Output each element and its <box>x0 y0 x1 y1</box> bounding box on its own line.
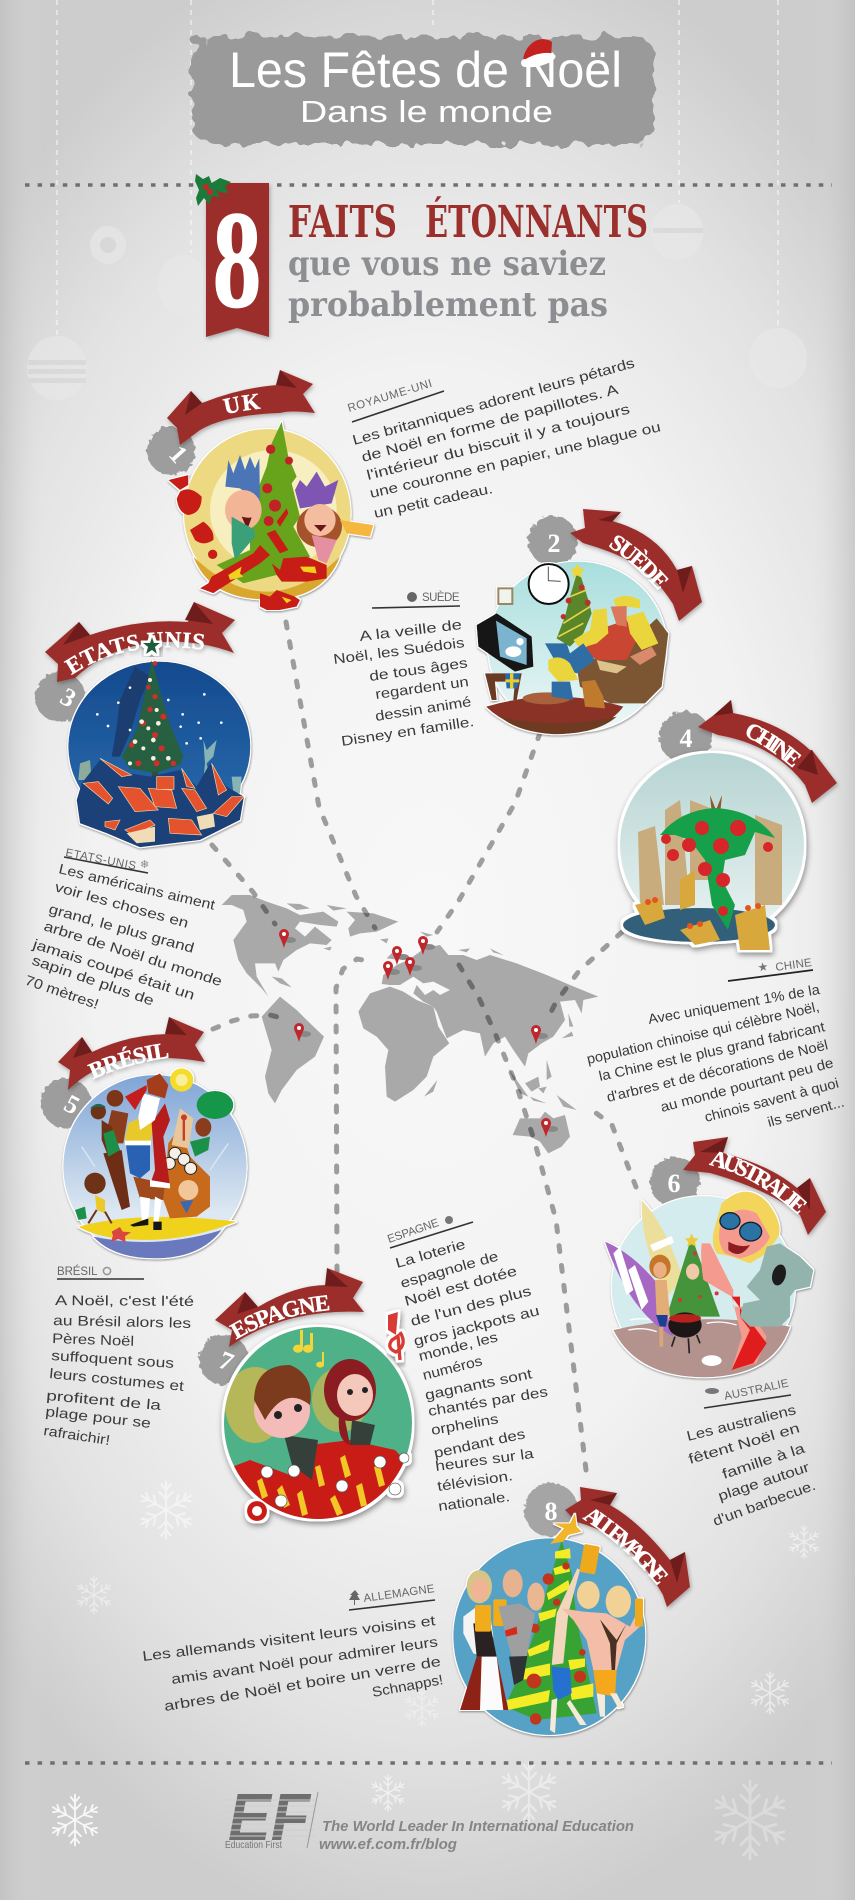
logo: EF: EF <box>228 1780 312 1855</box>
ribbon: Etats-Unis: ETATS UNIS <box>64 632 206 676</box>
ribbon: Chine: CHINE <box>746 724 802 768</box>
text: Etats-Unis fact: voir les choses en <box>53 878 190 931</box>
title text: Dans le monde <box>300 94 553 129</box>
family <box>583 620 637 660</box>
text: Suède fact: dessin animé <box>374 693 473 724</box>
logo: EF: Education First <box>225 1839 282 1851</box>
text: Australie fact <box>685 1401 818 1529</box>
text: Allemagne fact: Schnapps! <box>371 1671 444 1700</box>
number badge 8 <box>524 1483 578 1537</box>
icon: holly <box>195 174 231 206</box>
text: Etats-Unis fact: jamais coupé était un <box>30 935 197 1003</box>
text: Brésil fact: rafraichir! <box>43 1422 111 1448</box>
text: Etats-Unis fact: grand, le plus grand <box>47 900 196 956</box>
panel: Chine <box>585 700 846 1130</box>
ribbon: Etats-Unis <box>45 602 237 685</box>
ribbon: UK: UK <box>222 394 261 414</box>
dotted divider top <box>25 183 832 187</box>
hanging ornaments <box>27 0 807 400</box>
icon: santa hat <box>521 39 557 70</box>
village <box>77 760 244 847</box>
caption: Suède <box>372 591 460 608</box>
text: UK fact <box>351 354 662 521</box>
text: Espagne fact: orphelins <box>430 1410 499 1438</box>
text: Suède fact <box>332 616 475 749</box>
number badge 1: 1 <box>163 440 193 469</box>
heading: ÉTONNANTS <box>425 195 648 248</box>
caption: Etats-Unis: ETATS-UNIS <box>64 847 137 873</box>
ribbon: Suède: SUÈDE <box>609 536 669 594</box>
title banner <box>192 36 654 144</box>
couch <box>577 618 668 703</box>
text: Etats-Unis fact: Les américains aiment <box>57 860 217 913</box>
koala <box>740 1243 813 1327</box>
caption: Chine: ★ <box>757 959 769 975</box>
text: Brésil fact: Pères Noël <box>52 1330 134 1349</box>
map: australia <box>513 1112 570 1153</box>
illustration: German party <box>453 1513 645 1735</box>
number badge 7 <box>199 1335 249 1385</box>
ribbon: Chine <box>698 700 839 806</box>
caption: Australie <box>704 1377 791 1408</box>
text: Allemagne fact: amis avant Noël pour admirer leurs <box>170 1633 439 1687</box>
ribbon: Brésil <box>58 1017 207 1092</box>
heading <box>288 195 648 325</box>
TV and furniture <box>477 613 533 672</box>
text: Brésil fact: profitent de la <box>46 1387 162 1413</box>
panel: Allemagne <box>141 1482 693 1738</box>
text: Australie fact: Les australiens <box>685 1401 797 1444</box>
text: Brésil fact: plage pour se <box>45 1403 152 1431</box>
text: Suède fact: de tous âges <box>368 654 468 684</box>
text: Suède fact: Noël, les Suédois <box>332 634 465 667</box>
heading: que vous ne saviez <box>288 244 606 284</box>
number badge 1 <box>147 427 195 475</box>
number badge 5 <box>41 1078 91 1128</box>
illustration: Swedish family watching TV <box>477 562 668 734</box>
woman <box>701 1243 767 1370</box>
man 2 arm up <box>552 1568 580 1665</box>
map: africa <box>358 987 449 1102</box>
text: Australie fact: famille à la <box>720 1440 807 1482</box>
text: Suède fact: A la veille de <box>358 616 463 644</box>
text: Allemagne fact <box>141 1612 444 1714</box>
tree <box>557 568 592 647</box>
icon: tree top star <box>143 637 160 654</box>
caption: Brésil <box>57 1265 144 1279</box>
text: Chine fact <box>585 981 846 1130</box>
caption: Australie: AUSTRALIE <box>723 1377 790 1403</box>
right kid and woman <box>178 1180 198 1200</box>
caption: Espagne: ESPAGNE <box>386 1217 441 1246</box>
dashed routes <box>212 622 636 1470</box>
text: Espagne fact: heures sur la <box>434 1445 535 1474</box>
text: Chine fact: chinois savent à quoi <box>703 1075 840 1125</box>
text: Australie fact: fêtent Noël en <box>686 1419 801 1467</box>
ribbon: UK <box>167 370 317 447</box>
heading: FAITS <box>288 197 397 248</box>
map: south america <box>262 997 324 1103</box>
number badge 2: 2 <box>548 529 560 558</box>
text: Espagne fact: gros jackpots au <box>412 1302 541 1349</box>
ribbon: Espagne: ESPAGNE <box>228 1295 330 1340</box>
panel: UK <box>146 354 662 614</box>
footer: EF logo and tagline <box>225 1780 634 1855</box>
text: Brésil fact <box>43 1292 194 1448</box>
text: Etats-Unis fact: arbre de Noël du monde <box>42 918 224 989</box>
tree <box>505 1540 597 1720</box>
text: Espagne fact: chantés par des <box>427 1383 549 1419</box>
number badge 8: 8 <box>544 1497 558 1526</box>
baubles <box>262 445 293 526</box>
title text: Les Fêtes de Noël <box>229 42 622 98</box>
text: UK fact: Les britanniques adorent leurs pétards <box>351 354 636 448</box>
star <box>550 1513 582 1544</box>
text: Espagne fact: Noël est dotée <box>403 1262 519 1309</box>
number badge 5: 5 <box>59 1089 85 1120</box>
caption: Royaume-Uni: ROYAUME-UNI <box>346 378 434 415</box>
text: Espagne fact: monde, les <box>417 1329 499 1364</box>
dotted divider bottom <box>25 1761 832 1765</box>
tagline: The World Leader In International Education <box>322 1818 634 1835</box>
map: south east asia islands <box>508 1060 577 1110</box>
tagline: www.ef.com.fr/blog <box>319 1836 457 1853</box>
text: Brésil fact: leurs costumes et <box>49 1365 185 1394</box>
santa <box>133 1177 165 1200</box>
illustration: Spanish lottery <box>224 1327 414 1525</box>
ribbon: Australie <box>683 1137 828 1238</box>
caption: Allemagne <box>349 1583 436 1610</box>
title text <box>229 42 622 129</box>
text: Chine fact: population chinoise qui célèbre Noël, <box>585 998 821 1067</box>
text: Espagne fact: nationale. <box>437 1488 511 1514</box>
text: Allemagne fact: arbres de Noël et boire un verre de <box>163 1653 442 1714</box>
text: Espagne fact: de l'un des plus <box>409 1282 533 1329</box>
text: Espagne fact: La loterie <box>393 1236 467 1271</box>
map: north america <box>222 895 338 997</box>
text: Chine fact: ils servent... <box>766 1093 846 1130</box>
icon: treble clef <box>388 1312 403 1360</box>
tagline <box>319 1818 634 1853</box>
text: Espagne fact: numéros <box>421 1352 484 1383</box>
man 1 <box>503 1569 523 1597</box>
text: UK fact: un petit cadeau. <box>372 480 494 521</box>
text: Australie fact: d'un barbecue. <box>711 1477 818 1529</box>
number badge 3 <box>35 672 85 722</box>
text: Brésil fact: suffoquent sous <box>51 1347 175 1371</box>
illustration: US giant tree <box>68 660 250 847</box>
caption: Allemagne: ALLEMAGNE <box>363 1583 436 1605</box>
number badge 3: 3 <box>55 682 81 713</box>
text: Brésil fact: A Noël, c'est l'été <box>55 1292 194 1309</box>
illustration: Australian beach barbecue <box>605 1192 813 1377</box>
panel: Espagne <box>198 1216 549 1530</box>
illustration: Brazilian Santa on beach <box>63 1068 247 1258</box>
text: Etats-Unis fact: sapin de plus de <box>30 952 157 1009</box>
caption: Chine <box>728 957 813 981</box>
text: Espagne fact <box>393 1236 549 1514</box>
text: Chine fact: Avec uniquement 1% de la <box>647 981 821 1027</box>
text: Espagne fact: pendant des <box>432 1425 526 1461</box>
ribbon with number 8: 8 <box>213 183 261 336</box>
lottery balls <box>261 1453 409 1507</box>
map pins <box>279 929 558 1137</box>
text: Espagne fact: espagnole de <box>398 1248 500 1291</box>
illustration: UK crackers <box>168 422 373 610</box>
illustration: Chinese tree factory <box>620 753 804 950</box>
number badge 4: 4 <box>680 724 692 753</box>
text: Espagne fact: télévision. <box>436 1467 514 1494</box>
ribbon: Brésil: BRÉSIL <box>87 1044 168 1082</box>
number badge 7: 7 <box>215 1345 238 1377</box>
text: Chine fact: d'arbres et de décorations de Noël <box>605 1036 829 1105</box>
panel: Brésil <box>40 1017 250 1448</box>
ribbon: Espagne <box>215 1268 366 1349</box>
text: Allemagne fact: Les allemands visitent leurs voisins et <box>141 1612 436 1664</box>
text: Espagne fact: gagnants sont <box>423 1365 533 1403</box>
ribbon: Suède <box>570 509 705 624</box>
man 3 back <box>562 1608 640 1670</box>
woman <box>467 1570 492 1603</box>
text: Etats-Unis fact <box>23 860 224 1012</box>
number badge 6 <box>650 1157 700 1207</box>
panel: Australie <box>603 1137 828 1529</box>
number badge 2 <box>528 516 578 566</box>
caption: Suède: SUÈDE <box>422 591 460 604</box>
text: Suède fact: regardent un <box>374 673 470 702</box>
ribbon: Allemagne <box>565 1487 693 1610</box>
caption: Espagne <box>386 1216 473 1248</box>
heading: probablement pas <box>288 285 608 325</box>
text: UK fact: de Noël en forme de papillotes. A <box>360 381 621 465</box>
panel: Suède <box>332 509 705 749</box>
panel: Etats-Unis <box>23 602 254 1012</box>
crackers <box>168 475 327 610</box>
ribbon: Australie: AUSTRALIE <box>708 1152 808 1217</box>
caption: Etats-Unis: ❄ <box>140 858 149 871</box>
map: eurasia <box>382 945 598 1067</box>
ribbon: Allemagne: ALLEMAGNE <box>582 1509 668 1586</box>
text: Brésil fact: au Brésil alors les <box>53 1312 191 1331</box>
world map <box>222 895 598 1153</box>
snowflakes <box>50 1482 820 1859</box>
text: UK fact: une couronne en papier, une blague ou <box>368 418 662 501</box>
left figures <box>103 1150 130 1210</box>
number badge 6: 6 <box>668 1169 680 1198</box>
text: Suède fact: Disney en famille. <box>340 713 475 749</box>
text: Etats-Unis fact: 70 mètres! <box>23 972 101 1012</box>
caption: Brésil: BRÉSIL <box>57 1265 98 1278</box>
text: Chine fact: au monde pourtant peu de <box>659 1054 835 1115</box>
dog <box>582 680 605 708</box>
text: Australie fact: plage autour <box>716 1459 811 1504</box>
caption: Chine: CHINE <box>775 957 813 974</box>
text: Chine fact: la Chine est le plus grand fabricant <box>597 1018 826 1084</box>
number badge 4 <box>659 711 711 763</box>
text: UK fact: l'intérieur du biscuit il y a toujours <box>365 400 631 483</box>
